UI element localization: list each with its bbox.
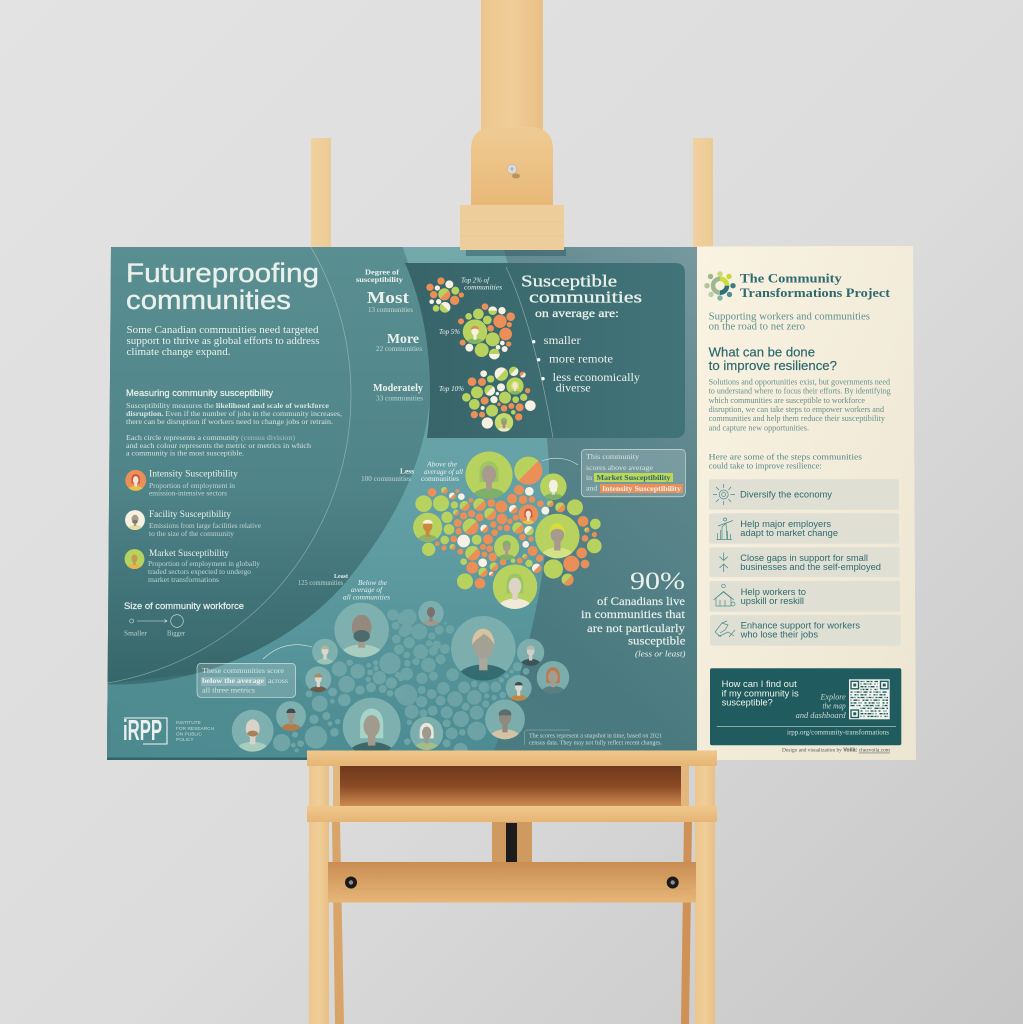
icon: bearded man xyxy=(334,602,389,658)
logo: IRPP: ON PUBLIC xyxy=(176,732,202,738)
labels: cluster annotations: Top 5% xyxy=(439,328,460,336)
labels: cluster annotations xyxy=(343,277,502,602)
legend: market susceptibility: Market Susceptibility xyxy=(149,549,229,559)
step: help major employers: adapt to market change xyxy=(740,528,838,538)
labels: cluster annotations: Top 2% of xyxy=(461,277,490,285)
labels: cluster annotations: Above the xyxy=(426,461,457,469)
step: upskill or reskill xyxy=(710,581,900,612)
panel: cream community transformations project: The Community xyxy=(740,271,842,286)
step: enhance support for workers xyxy=(710,615,901,646)
text block: measuring explanation: disruption. Even if the number of jobs in the community increases, xyxy=(126,409,342,418)
heading: susceptible communities: on average are: xyxy=(535,306,619,320)
logo: IRPP: POLICY xyxy=(176,737,194,743)
callout: ninety percent of Canadians: (less or least) xyxy=(635,649,686,659)
legend: size of community workforce: Size of community workforce xyxy=(124,601,244,611)
text block: measuring explanation xyxy=(126,401,342,458)
text block: solutions and opportunities: which communities are susceptible to workforce xyxy=(709,396,865,405)
callout: find out about my community: How can I find out xyxy=(722,679,797,689)
labels: degree of susceptibility: 125 communities xyxy=(298,580,343,587)
callout: ninety percent of Canadians: in communities that xyxy=(581,609,686,621)
icon: QR code xyxy=(849,679,890,719)
legend: intensity susceptibility: Intensity Susceptibility xyxy=(149,470,238,480)
labels: cluster annotations: average of all xyxy=(424,468,463,476)
footnote: data snapshot xyxy=(524,730,663,746)
labels: degree of susceptibility: Moderately xyxy=(373,383,423,394)
legend: market susceptibility: Proportion of employment in globally xyxy=(148,559,260,568)
text block: project tagline xyxy=(709,311,870,333)
callout: ninety percent of Canadians: are not particularly xyxy=(587,623,685,635)
text block: steps intro: could take to improve resilience: xyxy=(709,461,822,470)
text block: measuring explanation: Each circle represents a community (census division) xyxy=(126,433,295,442)
intro text: Some Canadian communities need targeted xyxy=(126,324,319,336)
callout: find out about my community: Explore xyxy=(819,692,846,701)
labels: degree of susceptibility: susceptibility xyxy=(356,275,403,284)
chart: bubble cluster for less susceptible communities xyxy=(413,451,602,617)
text block: solutions and opportunities: to understand where to focus their efforts. By identifying xyxy=(709,387,891,396)
heading: susceptible communities xyxy=(521,272,642,320)
panel: cream community transformations project xyxy=(697,246,916,760)
legend: facility susceptibility xyxy=(125,510,262,538)
heading: susceptible communities: Susceptible xyxy=(521,272,617,291)
panel: cream community transformations project: Transformations Project xyxy=(740,285,891,300)
icon: man with blond hair xyxy=(451,616,516,680)
logo: IRPP: INSTITUTE xyxy=(176,720,201,726)
legend: intensity susceptibility: emission-intensive sectors xyxy=(149,488,227,498)
list: traits of susceptible communities xyxy=(532,335,640,395)
logo: community transformations project xyxy=(704,271,736,301)
icon: woman with white hair xyxy=(410,716,444,750)
text block: solutions and opportunities xyxy=(709,378,891,432)
icon: man with dark hair xyxy=(276,701,306,731)
list: traits of susceptible communities: less economically xyxy=(553,372,640,384)
step: help major employers xyxy=(709,513,899,544)
callout: find out about my community: the map xyxy=(822,702,846,711)
heading: what can be done: What can be done xyxy=(709,346,815,360)
callout: above average example: scores above average xyxy=(586,463,654,472)
cluster: top 10 percent xyxy=(462,367,536,436)
text block: project tagline: on the road to net zero xyxy=(709,322,805,333)
icon: blond man xyxy=(535,514,580,558)
labels: cluster annotations: communities xyxy=(464,284,502,292)
icon: left bolt xyxy=(345,876,357,888)
callout: below average communities: These communities score xyxy=(202,666,285,675)
text block: steps intro: Here are some of the steps communities xyxy=(709,452,862,461)
easel: rear legs and back panel xyxy=(332,766,692,1024)
text block: solutions and opportunities: Solutions and opportunities exist, but governments need xyxy=(709,378,890,387)
title: Futureproofing xyxy=(126,258,319,288)
legend: facility susceptibility: to the size of the community xyxy=(149,529,234,538)
step: enhance support for workers: who lose their jobs xyxy=(740,630,819,640)
text block: solutions and opportunities: and capture new opportunities. xyxy=(709,423,809,432)
callout: ninety percent of Canadians xyxy=(581,568,686,659)
step: close gaps in support xyxy=(709,547,900,577)
icon: older man xyxy=(517,638,544,666)
callout: above average example: This community xyxy=(586,452,639,461)
cluster: top 2 percent xyxy=(426,277,464,313)
text block: steps intro xyxy=(709,452,862,470)
icon: man with green hair xyxy=(494,534,520,560)
callout: find out about my community: susceptible? xyxy=(722,698,773,708)
icon: woman with long teal hair xyxy=(342,698,400,750)
icon: bald man with ginger beard xyxy=(232,710,274,752)
text block: measuring explanation: Susceptibility measures the likelihood and scale of workforce xyxy=(126,401,330,410)
list: traits of susceptible communities: smaller xyxy=(544,335,581,347)
labels: cluster annotations: communities xyxy=(421,475,459,483)
legend: size of community workforce: Bigger xyxy=(167,629,185,638)
callout: above average example xyxy=(542,449,685,497)
chart: bubble clusters for most, more and moderately susceptible xyxy=(426,277,536,436)
panel: susceptible communities xyxy=(405,263,685,438)
callout: find out about my community: and dashboard xyxy=(796,711,847,720)
callout: above average example: in xyxy=(586,473,592,482)
credit line: Design and visualization by Voilà: chezvoila.com xyxy=(782,748,891,754)
step: enhance support for workers: Enhance support for workers xyxy=(741,621,861,631)
text block: measuring explanation: there can be disruption if workers need to change jobs or retrain. xyxy=(126,417,333,426)
callout: above average example: Market Susceptibility xyxy=(596,473,671,482)
heading: susceptible communities: communities xyxy=(529,288,642,307)
footnote: data snapshot: census data. They may not fully reflect recent changes. xyxy=(529,740,663,746)
labels: cluster annotations: Below the xyxy=(358,579,387,587)
logo: IRPP: iRPP xyxy=(123,715,162,747)
logo: IRPP: FOR RESEARCH xyxy=(176,726,215,732)
labels: degree of susceptibility: Most xyxy=(367,288,409,307)
icon: bald man with white beard xyxy=(540,474,567,500)
callout: find out about my community: if my community is xyxy=(722,688,799,698)
labels: degree of susceptibility xyxy=(298,268,423,587)
easel: front legs, shelves and cross bar xyxy=(307,750,717,1024)
text block: project tagline: Supporting workers and communities xyxy=(709,311,870,322)
icon: woman with red hair xyxy=(518,504,538,524)
callout: find out about my community: irpp.org/community-transformations xyxy=(787,730,889,737)
icon: man at top xyxy=(418,600,444,626)
intro text: support to thrive as global efforts to address xyxy=(126,335,320,347)
step: diversify the economy: Diversify the economy xyxy=(740,489,833,499)
step: upskill or reskill: upskill or reskill xyxy=(741,596,804,606)
title: communities xyxy=(126,285,291,315)
legend: facility susceptibility: Facility Susceptibility xyxy=(149,510,231,520)
icon: man with white hair xyxy=(413,512,442,542)
labels: degree of susceptibility: 13 communities xyxy=(368,307,413,314)
panel: main teal board xyxy=(107,247,697,760)
callout: ninety percent of Canadians: susceptible xyxy=(628,636,686,648)
icon: man with orange shirt xyxy=(506,675,532,701)
labels: degree of susceptibility: More xyxy=(387,332,419,347)
icon: woman with auburn hair xyxy=(536,661,570,694)
labels: degree of susceptibility: 33 communities xyxy=(376,396,423,403)
callout: below average communities: across xyxy=(268,676,288,685)
legend: size of community workforce: Smaller xyxy=(124,629,147,638)
labels: cluster annotations: all communities xyxy=(343,594,390,602)
list: traits of susceptible communities: more remote xyxy=(549,354,613,366)
callout: ninety percent of Canadians: of Canadians live xyxy=(597,596,685,608)
step: diversify the economy xyxy=(709,479,899,510)
cluster: top 5 percent xyxy=(458,303,515,362)
callout: ninety percent of Canadians: 90% xyxy=(630,568,685,595)
legend: market susceptibility: traded sectors expected to undergo xyxy=(148,567,251,576)
list: traits of susceptible communities: diverse xyxy=(556,383,591,395)
step: close gaps in support: businesses and the self-employed xyxy=(740,562,881,572)
footnote: data snapshot: The scores represent a snapshot in time, based on 2021 xyxy=(529,734,662,740)
heading: what can be done: to improve resilience? xyxy=(709,359,837,373)
callout: below average communities: all three metrics xyxy=(202,686,255,695)
legend: market susceptibility xyxy=(124,549,260,584)
intro text xyxy=(126,324,320,358)
callout: find out about my community xyxy=(710,668,901,745)
step: upskill or reskill: Help workers to xyxy=(741,587,806,597)
icon: woman with green hair xyxy=(466,452,512,499)
callout: below average communities xyxy=(197,645,312,697)
callout: above average example: Intensity Susceptibility xyxy=(602,484,681,493)
legend: market susceptibility: market transformations xyxy=(148,575,219,584)
easel: top clamp with screw xyxy=(460,127,566,256)
easel: top post xyxy=(311,0,713,248)
text block: solutions and opportunities: communities and help them reduce their susceptibility xyxy=(709,414,885,423)
chart: bubble cluster for least susceptible communities xyxy=(232,601,569,766)
labels: degree of susceptibility: 100 communities xyxy=(361,476,411,483)
callout: above average example: and xyxy=(586,484,597,493)
legend: facility susceptibility: Emissions from large facilities relative xyxy=(149,521,262,530)
callout: below average communities: below the average xyxy=(202,676,265,685)
heading: what can be done xyxy=(709,346,837,373)
icon: person with sand shirt xyxy=(485,700,525,740)
legend: intensity susceptibility: Proportion of employment in xyxy=(149,481,235,490)
icon: young person xyxy=(312,638,338,665)
icon: person in brown xyxy=(306,666,332,692)
labels: degree of susceptibility: Least xyxy=(334,573,349,580)
labels: degree of susceptibility: Degree of xyxy=(365,268,399,277)
text block: measuring explanation: and each colour represents the metric or metrics in which xyxy=(126,441,311,450)
step: help major employers: Help major employers xyxy=(740,519,832,529)
labels: cluster annotations: average of xyxy=(351,586,383,594)
icon: right bolt xyxy=(667,876,679,888)
legend: size of community workforce xyxy=(124,601,244,638)
title xyxy=(126,258,319,315)
labels: degree of susceptibility: 22 communities xyxy=(376,346,422,353)
labels: degree of susceptibility: Less xyxy=(400,468,414,476)
legend: intensity susceptibility xyxy=(125,470,238,498)
labels: cluster annotations: Top 10% xyxy=(439,385,464,393)
text block: solutions and opportunities: disruption, we can take steps to empower workers and xyxy=(709,405,884,414)
icon: woman with white top xyxy=(492,564,538,609)
text block: measuring explanation: a community is the most susceptible. xyxy=(126,448,244,458)
intro text: climate change expand. xyxy=(126,346,231,358)
step: close gaps in support: Close gaps in support for small xyxy=(740,553,868,563)
heading: measuring community susceptibility: Measuring community susceptibility xyxy=(126,388,273,398)
